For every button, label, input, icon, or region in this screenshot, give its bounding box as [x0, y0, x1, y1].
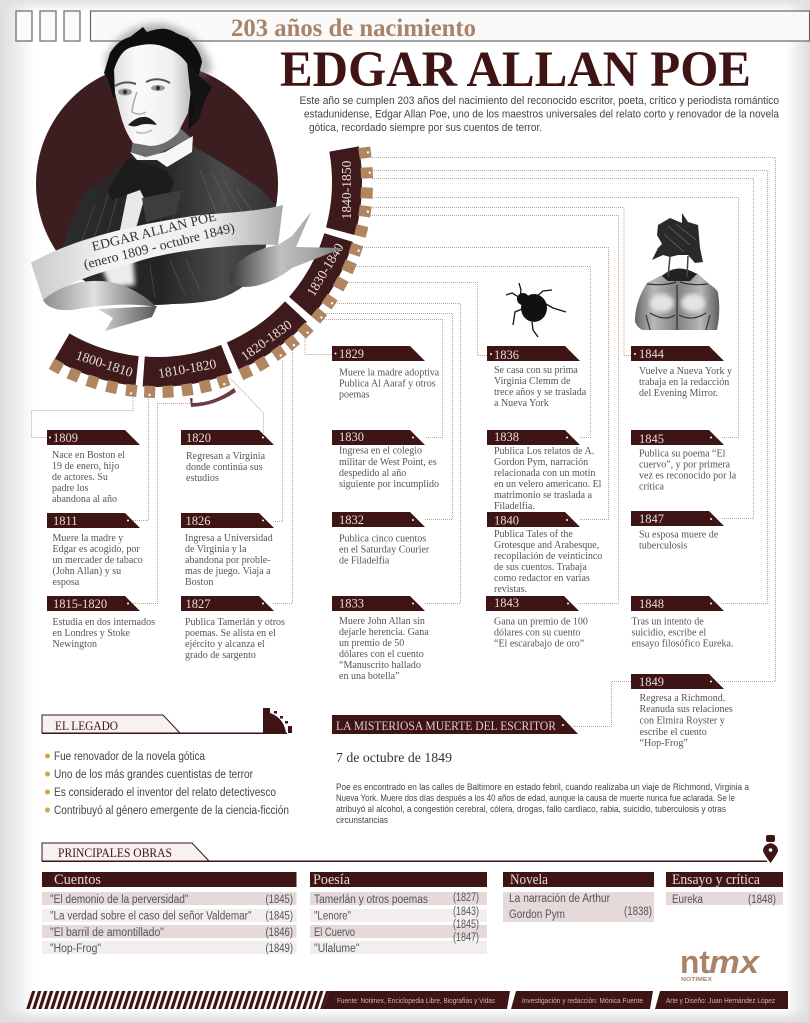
- event 1843: [486, 596, 588, 650]
- event 1849: 1849: [639, 675, 664, 689]
- column: cuentos: (1845): [266, 894, 293, 906]
- column: ensayo y critica: (1848): [748, 894, 776, 906]
- head shadow: [105, 24, 212, 85]
- muerte paragraph: Nueva York. Muere dos días después a los 40 años de edad, aunque la causa de muerte nunca fue aclarada. Se le: [336, 793, 735, 804]
- event 1848: suicidio, escribe el: [632, 628, 706, 638]
- event 1836: Se casa con su prima: [494, 365, 578, 376]
- legado heading: [42, 715, 287, 734]
- event 1840: Publica Tales of the: [494, 529, 573, 540]
- event 1815-1820: Estudia en dos internados: [52, 617, 155, 628]
- event 1830: militar de West Point, es: [339, 457, 437, 468]
- shirt: [118, 180, 146, 240]
- column: cuentos: Cuentos: [54, 872, 101, 888]
- column: novela: (1838): [624, 906, 652, 918]
- event 1833: un premio de 50: [339, 638, 404, 649]
- main ribbon band: [31, 205, 283, 300]
- event 1815-1820: Newington: [52, 639, 97, 650]
- intro text: Este año se cumplen 203 años del nacimiento del reconocido escritor, poeta, crítico y periodista romántico: [300, 95, 779, 107]
- event 1827: poemas. Se alista en el: [185, 628, 276, 639]
- event 1833: [332, 596, 429, 682]
- event 1811: 1811: [53, 514, 78, 528]
- event 1811: Edgar es acogido, por: [52, 544, 140, 555]
- column: novela: La narración de Arthur: [509, 893, 610, 905]
- legado list: Es considerado el inventor del relato detectivesco: [54, 787, 276, 799]
- event 1811: un mercader de tabaco: [52, 555, 143, 566]
- portrait disc: [36, 63, 278, 305]
- column: ensayo y critica: [666, 872, 783, 906]
- event 1844: del Evening Mirror.: [639, 388, 718, 399]
- eyes and brows: [115, 79, 170, 96]
- event 1830: 1830: [339, 430, 364, 444]
- hair: [104, 27, 212, 130]
- event 1833: 1833: [339, 596, 364, 610]
- event 1829: [332, 346, 440, 400]
- portrait: [36, 24, 278, 305]
- event 1838: Gordon Pym, narración: [494, 457, 588, 468]
- face: [114, 44, 191, 146]
- coat: [63, 146, 276, 304]
- legado list: Contribuyó al género emergente de la ciencia-ficción: [54, 805, 289, 817]
- event 1838: 1838: [494, 430, 519, 444]
- event 1844: 1844: [639, 347, 665, 361]
- torso: [635, 273, 719, 330]
- column: poesia: "Lenore": [314, 910, 351, 922]
- beetle icon: [506, 283, 566, 337]
- footer design credit: [655, 991, 788, 1009]
- event 1826: mas de juego. Viaja a: [185, 566, 271, 577]
- logo: ntmx: nt: [680, 944, 710, 980]
- decade labels: 1840-1850: [339, 160, 354, 219]
- dotted connector lines: [32, 158, 776, 726]
- event 1830: siguiente por incumplido: [339, 479, 439, 490]
- event 1820: [181, 430, 274, 484]
- intro text: gótica, recordado siempre por sus cuentos de terror.: [309, 122, 542, 134]
- event 1843: 1843: [494, 596, 519, 610]
- legado list: Fue renovador de la novela gótica: [54, 751, 206, 763]
- bracket under 1810-1820: [190, 388, 236, 407]
- footer design credit: Arte y Diseño: Juan Hernández López: [666, 998, 775, 1005]
- timeline column 4: [486, 346, 602, 650]
- decade bands: [62, 149, 347, 372]
- event 1844: [631, 346, 732, 399]
- icon: arc corner: [263, 708, 292, 733]
- event 1849: “Hop-Frog”: [640, 738, 688, 749]
- event 1845: [631, 430, 737, 492]
- event 1847: [631, 511, 724, 552]
- event 1845: cuervo”, y por primera: [639, 460, 731, 470]
- event 1811: Muere la madre y: [52, 533, 123, 544]
- event 1848: Tras un intento de: [632, 616, 704, 628]
- event 1832: 1832: [339, 513, 364, 527]
- event 1830: Ingresa en el colegio: [339, 446, 422, 456]
- lower left fold: [43, 281, 157, 310]
- column: poesia: (1845): [453, 919, 479, 931]
- event 1827: ejército y alcanza el: [185, 639, 265, 650]
- intro text: estadunidense, Edgar Allan Poe, uno de los maestros universales del relato corto y renovador de la novela: [304, 108, 780, 120]
- column: novela: Novela: [510, 872, 548, 888]
- event 1838: Filadelfia.: [494, 501, 535, 512]
- event 1845: 1845: [639, 432, 664, 446]
- timeline arc: [49, 146, 373, 398]
- event 1820: donde continúa sus: [186, 462, 263, 473]
- column: ensayo y critica: Ensayo y crítica: [672, 872, 760, 888]
- event 1820: 1820: [186, 431, 211, 445]
- column: novela: [503, 872, 654, 922]
- column: poesia: (1827): [453, 892, 479, 904]
- event 1840: Grotesque and Arabesque,: [494, 540, 599, 551]
- event 1832: en el Saturday Courier: [339, 544, 430, 556]
- event 1845: crítica: [639, 482, 665, 492]
- footer research credit: Investigación y redacción: Mónica Fuente: [522, 998, 643, 1005]
- event 1840: de sus cuentos. Trabaja: [494, 562, 587, 573]
- event 1830: despedido al año: [339, 468, 406, 479]
- event 1809: padre los: [52, 483, 88, 494]
- event 1833: dólares con el cuento: [339, 649, 424, 660]
- raven: [652, 213, 703, 263]
- column: cuentos: "El demonio de la perversidad": [50, 894, 188, 906]
- event 1811: [47, 513, 143, 588]
- event 1829: 1829: [339, 347, 364, 361]
- event 1826: 1826: [186, 514, 210, 528]
- title: EDGAR ALLAN POE: [280, 42, 751, 98]
- event 1845: Publica su poema “El: [639, 448, 726, 460]
- event 1840: como redactor en varias: [494, 573, 590, 584]
- event 1809: 1809: [53, 431, 78, 445]
- event 1809: 19 de enero, hijo: [52, 461, 119, 472]
- decade labels: 1830-1840: [304, 240, 347, 299]
- legado list: Uno de los más grandes cuentistas de terror: [54, 769, 253, 781]
- footer source: [323, 991, 510, 1009]
- timeline column 5: [631, 346, 737, 749]
- timeline column 2: [181, 430, 285, 661]
- event 1836: Virginia Clemm de: [494, 376, 571, 387]
- muerte paragraph: atribuyó al alcohol, a congestión cerebral, cólera, drogas, fallo cardíaco, rabia, suicidio, tuberculosis y otras: [336, 804, 726, 815]
- column: poesia: "Ulalume": [314, 943, 360, 955]
- event 1847: Su esposa muere de: [639, 530, 719, 540]
- teeth: [49, 146, 373, 398]
- muerte paragraph: Poe es encontrado en las calles de Baltimore en estado febril, cuando realizaba un viaje de Richmond, Virginia a: [336, 782, 750, 793]
- muerte paragraph: circunstancias: [336, 815, 388, 826]
- column: poesia: Poesía: [313, 872, 350, 888]
- event 1849: con Elmira Royster y: [640, 716, 725, 726]
- coat hatching: [80, 170, 262, 298]
- event 1844: Vuelve a Nueva York y: [639, 366, 732, 377]
- event 1815-1820: 1815-1820: [53, 597, 107, 611]
- event 1820: estudios: [186, 473, 219, 484]
- event 1809: [47, 430, 140, 505]
- lower lip shadow: [136, 130, 152, 133]
- event 1826: Boston: [185, 577, 213, 588]
- right ribbon tail: [230, 212, 343, 287]
- event 1840: 1840: [494, 514, 519, 528]
- event 1836: trece años y se traslada: [494, 387, 587, 398]
- event 1827: Publica Tamerlán y otros: [185, 617, 285, 628]
- footer research credit: [511, 991, 653, 1009]
- icon: pen nib: [763, 835, 778, 863]
- panel: la misteriosa muerte: [332, 715, 750, 826]
- event 1840: revistas.: [494, 584, 527, 595]
- column: cuentos: "La verdad sobre el caso del señor Valdemar": [50, 910, 252, 922]
- column: ensayo y critica: Eureka: [672, 894, 704, 906]
- decade labels: 1810-1820: [157, 356, 218, 381]
- lower left tail: [98, 306, 157, 331]
- event 1811: (John Allan) y su: [52, 566, 121, 577]
- event 1829: Publica Al Aaraf y otros: [339, 378, 436, 390]
- timeline column 3: [332, 346, 440, 682]
- event 1838: en un velero americano. El: [494, 479, 602, 490]
- event 1844: trabaja en la redacción: [639, 377, 729, 388]
- column: cuentos: "El barril de amontillado": [50, 927, 164, 939]
- event 1826: [181, 513, 274, 588]
- event 1829: Muere la madre adoptiva: [339, 368, 440, 378]
- event 1809: abandona al año: [52, 494, 117, 505]
- event 1809: de actores. Su: [52, 472, 108, 483]
- event 1833: dejarle herencia. Gana: [339, 627, 429, 638]
- column: cuentos: [42, 872, 296, 955]
- event 1815-1820: [47, 596, 155, 650]
- event 1848: [631, 596, 733, 650]
- column: cuentos: (1845): [266, 910, 293, 922]
- logo: ntmx: mx: [709, 944, 760, 980]
- event 1838: [487, 430, 602, 512]
- logo: ntmx: NOTIMEX: [681, 977, 713, 983]
- muerte paragraph: [336, 782, 750, 826]
- legado heading: EL LEGADO: [55, 718, 118, 733]
- event 1836: a Nueva York: [494, 398, 549, 409]
- event 1832: [332, 512, 430, 566]
- column: poesia: Tamerlán y otros poemas: [314, 894, 428, 906]
- event 1838: relacionada con un motín: [494, 468, 595, 479]
- event 1847: 1847: [639, 512, 664, 526]
- column: novela: Gordon Pym: [509, 909, 565, 921]
- decade labels: [74, 160, 354, 381]
- column: poesia: (1843): [453, 906, 479, 918]
- event 1843: Gana un premio de 100: [494, 616, 588, 628]
- column: cuentos: (1846): [266, 927, 293, 939]
- event 1826: Ingresa a Universidad: [185, 533, 273, 544]
- timeline column 1: [47, 430, 155, 650]
- muerte heading: LA MISTERIOSA MUERTE DEL ESCRITOR: [336, 718, 556, 733]
- date: 7 de octubre de 1849: [336, 751, 452, 766]
- column: cuentos: "Hop-Frog": [50, 943, 101, 955]
- event 1845: vez es reconocido por la: [639, 470, 737, 482]
- event 1815-1820: en Londres y Stoke: [52, 628, 131, 639]
- event 1838: Publica Los relatos de A.: [494, 446, 594, 457]
- obras heading: PRINCIPALES OBRAS: [58, 845, 172, 860]
- event 1827: 1827: [186, 597, 210, 611]
- column: poesia: El Cuervo: [314, 927, 355, 939]
- event 1840: recopilación de veinticinco: [494, 551, 602, 562]
- hair right lock: [187, 62, 212, 128]
- event 1826: de Virginia y la: [185, 544, 247, 555]
- footer source: Fuente: Notimex, Enciclopedia Libre, Biografías y Vidas: [337, 998, 495, 1005]
- footer: [26, 991, 788, 1009]
- event 1830: [332, 430, 439, 490]
- intro text: [300, 95, 780, 134]
- event 1829: poemas: [339, 390, 370, 400]
- event 1809: Nace en Boston el: [52, 450, 125, 461]
- panel: principales obras: [42, 835, 783, 955]
- decade labels: 1800-1810: [74, 347, 135, 380]
- ribbon text: EDGAR ALLAN POE: [90, 208, 218, 254]
- event 1836: [487, 346, 587, 409]
- panel: el legado: [42, 708, 292, 817]
- neck: [131, 128, 191, 158]
- logo: ntmx: [680, 944, 760, 983]
- column: cuentos: (1849): [266, 943, 293, 955]
- event 1847: tuberculosis: [639, 540, 687, 552]
- event 1849: Reanuda sus relaciones: [640, 704, 733, 715]
- event 1832: de Filadelfia: [339, 556, 390, 566]
- event 1843: dólares con su cuento: [494, 628, 580, 638]
- collar: [130, 136, 193, 167]
- event 1849: [631, 674, 733, 749]
- legado list: [45, 751, 289, 817]
- subtitle: 203 años de nacimiento: [231, 15, 476, 42]
- event 1849: Regresa a Richmond.: [640, 693, 725, 704]
- footer stripes: [26, 991, 329, 1009]
- event 1848: 1848: [639, 597, 664, 611]
- event 1832: Publica cinco cuentos: [339, 534, 426, 544]
- event 1848: ensayo filosófico Eureka.: [632, 638, 733, 650]
- event 1833: Muere John Allan sin: [339, 616, 425, 627]
- event 1827: [181, 596, 285, 661]
- event 1838: matrimonio se traslada a: [494, 490, 593, 501]
- event 1833: “Manuscrito hallado: [339, 660, 421, 671]
- column: poesia: [310, 872, 487, 955]
- event 1849: escribe el cuento: [640, 727, 707, 738]
- event 1836: 1836: [494, 348, 519, 362]
- nose: [132, 92, 146, 114]
- event 1811: esposa: [52, 577, 80, 588]
- column: poesia: (1847): [453, 932, 479, 944]
- decade labels: 1820-1830: [238, 317, 295, 364]
- event 1833: en una botella”: [339, 671, 400, 682]
- event 1843: “El escarabajo de oro”: [494, 638, 584, 650]
- event 1827: grado de sargento: [185, 650, 256, 661]
- event 1826: abandona por proble-: [185, 555, 271, 566]
- raven and torso illustration: [635, 213, 719, 330]
- tooth dots: [130, 151, 371, 396]
- obras heading: [42, 843, 767, 862]
- ribbon text: (enero 1809 - octubre 1849): [82, 220, 236, 272]
- event 1820: Regresan a Virginia: [186, 451, 266, 462]
- ribbon: [31, 205, 343, 331]
- header boxes: [16, 11, 810, 41]
- event 1840: [487, 512, 602, 595]
- moustache: [128, 117, 157, 126]
- cravat: [108, 158, 174, 200]
